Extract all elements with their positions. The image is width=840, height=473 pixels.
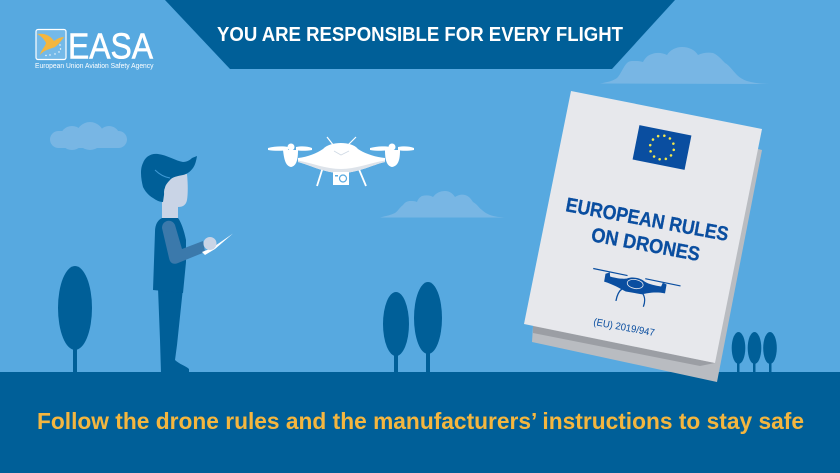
legs	[158, 288, 189, 373]
left rotor	[268, 144, 312, 167]
cloud: centre	[380, 191, 505, 218]
right rotor	[370, 144, 414, 167]
ear	[164, 186, 171, 198]
header banner	[165, 0, 675, 69]
tree: left	[58, 266, 92, 374]
arm	[162, 221, 205, 264]
booklet drone icon	[588, 268, 681, 313]
ground band	[0, 372, 840, 473]
neck and face	[162, 174, 188, 222]
cloud: top right	[600, 47, 770, 84]
rules booklet: ON DRONES	[590, 224, 702, 266]
logo wordmark: EASA	[68, 26, 153, 66]
cloud: left	[50, 122, 127, 150]
back page	[532, 149, 762, 382]
drone camera	[333, 172, 349, 185]
rules booklet	[524, 91, 762, 382]
torso	[153, 218, 186, 293]
hair	[141, 154, 197, 202]
front page	[524, 91, 762, 363]
trees: right trio	[732, 332, 777, 374]
EASA logo	[35, 26, 154, 70]
header text: YOU ARE RESPONSIBLE FOR EVERY FLIGHT	[217, 24, 623, 46]
hair highlight	[155, 170, 170, 178]
person with controller	[141, 154, 233, 373]
drone: white quadcopter	[268, 137, 414, 186]
regulation number: (EU) 2019/947	[592, 317, 656, 339]
EU flag	[633, 125, 691, 170]
hand and controller	[202, 234, 233, 255]
drone body	[298, 143, 385, 173]
logo icon: bird	[36, 30, 66, 60]
booklet title: EUROPEAN RULES	[564, 194, 730, 246]
bottom message: Follow the drone rules and the manufacturers’ instructions to stay safe	[37, 408, 804, 434]
trees: centre pair	[383, 282, 442, 374]
logo tagline: European Union Aviation Safety Agency	[35, 63, 154, 70]
